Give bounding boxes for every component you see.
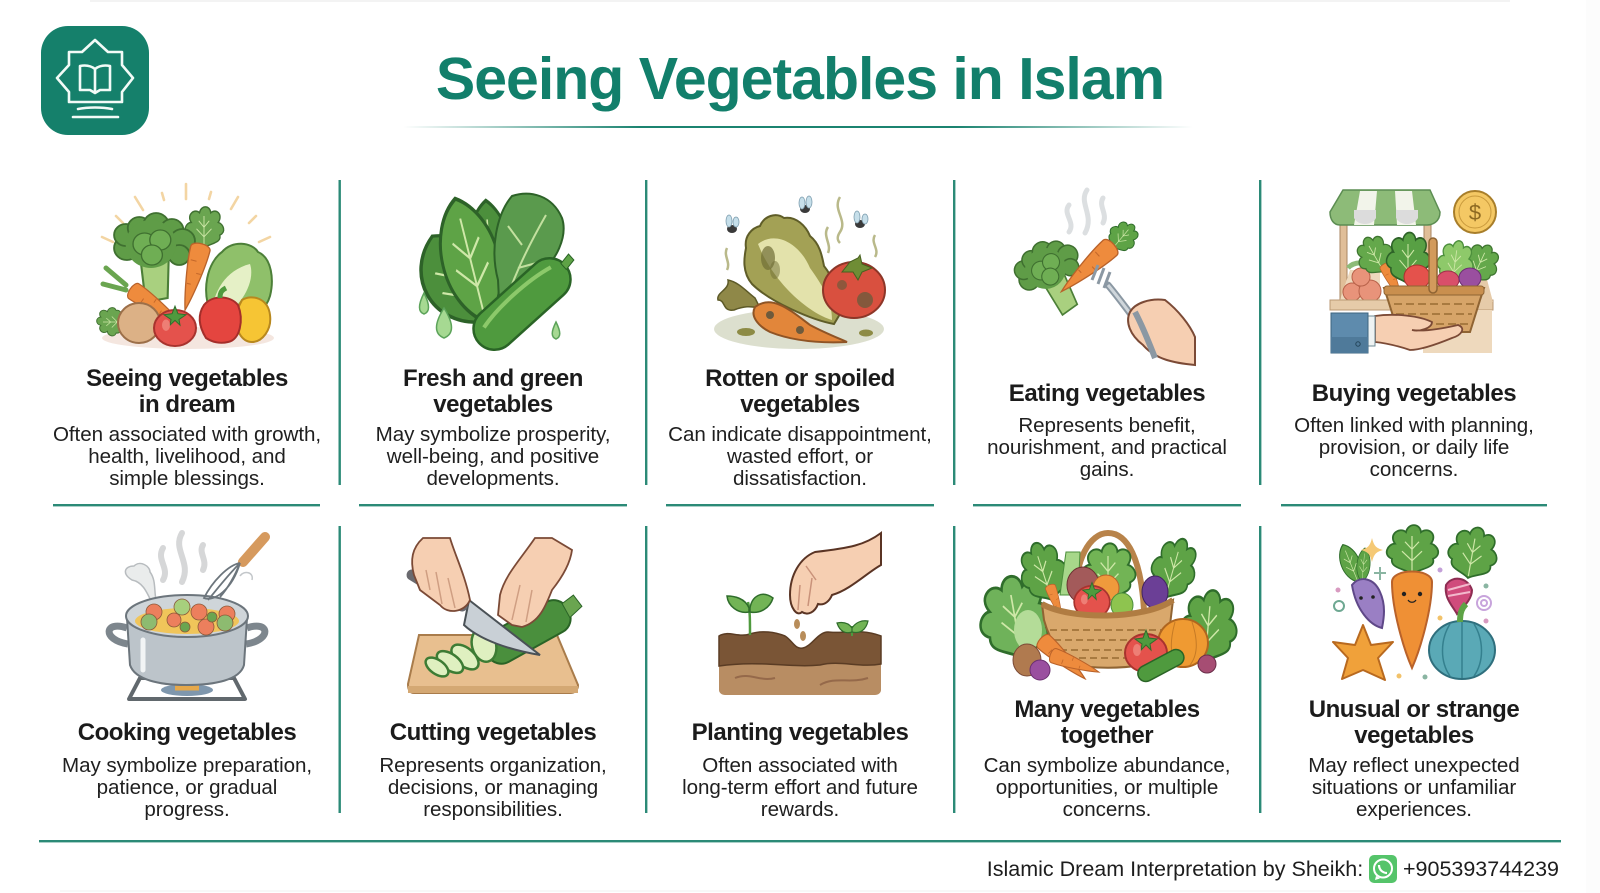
panel: many vegetables together — [973, 533, 1240, 821]
panel: rotten or spoiled vegetables — [668, 196, 932, 490]
description: Often associated with growth, — [53, 423, 321, 446]
description: decisions, or managing — [388, 776, 598, 799]
description: Represents benefit, — [1018, 414, 1196, 437]
grid dividers — [39, 180, 1561, 842]
description: simple blessings. — [109, 467, 265, 490]
icon: pot on stove with whisk — [109, 533, 265, 699]
heading: Seeing vegetables — [86, 365, 288, 392]
panel: fresh and green vegetables — [376, 192, 610, 490]
description: concerns. — [1063, 798, 1151, 821]
description: responsibilities. — [423, 798, 563, 821]
icon: smiling whimsical vegetables — [1333, 523, 1501, 680]
icon: rotten produce with flies — [714, 196, 885, 349]
description: nourishment, and practical — [987, 436, 1227, 459]
description: health, livelihood, and — [88, 445, 286, 468]
heading: Eating vegetables — [1009, 380, 1205, 407]
description: progress. — [144, 798, 230, 821]
description: dissatisfaction. — [733, 467, 867, 490]
description: Often associated with — [702, 754, 898, 777]
footer label: Islamic Dream Interpretation by Sheikh: — [987, 857, 1363, 881]
icon: market stall, basket and coin: $ — [1469, 200, 1481, 225]
description: gains. — [1080, 458, 1134, 481]
heading: vegetables — [1354, 722, 1474, 749]
title rule — [403, 126, 1193, 128]
panel: buying vegetables — [1294, 190, 1534, 481]
description: well-being, and positive — [386, 445, 599, 468]
description: provision, or daily life — [1319, 436, 1509, 459]
description: May symbolize preparation, — [62, 754, 312, 777]
panel: eating vegetables — [987, 190, 1227, 481]
icon: hands slicing zucchini on board — [408, 538, 588, 693]
heading: vegetables — [740, 391, 860, 418]
description: situations or unfamiliar — [1312, 776, 1516, 799]
description: experiences. — [1356, 798, 1472, 821]
description: opportunities, or multiple — [996, 776, 1218, 799]
heading: Buying vegetables — [1312, 380, 1516, 407]
icon: whatsapp — [1369, 855, 1397, 883]
panel: planting vegetables — [682, 533, 918, 821]
description: Can indicate disappointment, — [668, 423, 932, 446]
description: concerns. — [1370, 458, 1458, 481]
icon: vegetables with rays — [97, 184, 274, 349]
heading: Many vegetables — [1014, 696, 1200, 723]
heading: together — [1061, 722, 1153, 749]
footer — [987, 855, 1559, 883]
icon: hand sowing seeds in soil — [719, 533, 881, 695]
panel: cooking vegetables — [62, 533, 312, 821]
description: Often linked with planning, — [1294, 414, 1534, 437]
phone number: +905393744239 — [1403, 857, 1559, 881]
icon: market stall, basket and coin — [1330, 190, 1505, 353]
heading: in dream — [139, 391, 235, 418]
description: wasted effort, or — [726, 445, 873, 468]
heading: vegetables — [433, 391, 553, 418]
description: rewards. — [761, 798, 839, 821]
description: May reflect unexpected — [1308, 754, 1520, 777]
icon: full basket of vegetables — [973, 533, 1240, 685]
heading: Cooking vegetables — [78, 719, 296, 746]
description: developments. — [426, 467, 560, 490]
logo — [41, 26, 149, 135]
icon: fork with carrot and hand — [1007, 190, 1195, 365]
title: Seeing Vegetables in Islam — [436, 46, 1164, 112]
panel: cutting vegetables — [379, 538, 607, 821]
description: Can symbolize abundance, — [984, 754, 1230, 777]
heading: Cutting vegetables — [390, 719, 596, 746]
description: patience, or gradual — [97, 776, 277, 799]
icon: leafy greens and cucumber — [403, 192, 587, 358]
heading: Rotten or spoiled — [705, 365, 895, 392]
heading: Unusual or strange — [1309, 696, 1519, 723]
heading: Planting vegetables — [692, 719, 909, 746]
description: long-term effort and future — [682, 776, 918, 799]
panel: seeing vegetables in dream — [53, 184, 321, 490]
heading: Fresh and green — [403, 365, 583, 392]
description: Represents organization, — [379, 754, 607, 777]
panel: unusual or strange vegetables — [1308, 523, 1520, 821]
description: May symbolize prosperity, — [376, 423, 610, 446]
